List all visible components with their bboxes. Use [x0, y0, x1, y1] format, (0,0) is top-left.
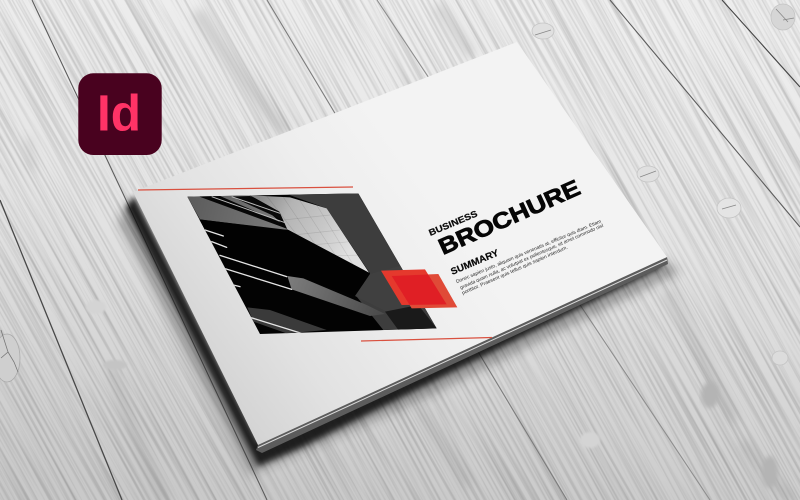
heading: summary: SUMMARY [449, 247, 501, 278]
lower facade [287, 276, 385, 316]
dark sky [287, 193, 437, 330]
upper black stripes [199, 196, 289, 229]
central black band [200, 220, 370, 276]
brochure [133, 42, 668, 453]
red rule top [138, 187, 353, 190]
body paragraph: porttitor. Praesent quis tellus quis sapien interdum. [461, 245, 569, 296]
red rule bottom [361, 338, 492, 341]
brochure page edge [256, 257, 668, 453]
brochure shadow [118, 196, 680, 474]
heading: business: BUSINESS [427, 209, 479, 238]
icon: Adobe InDesign [78, 73, 162, 155]
cover photo: black and white building [187, 193, 457, 334]
facade grid lines [267, 196, 360, 265]
heading: brochure: BROCHURE [435, 175, 584, 260]
red overlapping squares [381, 269, 457, 308]
lower dark gray block [355, 274, 370, 297]
icon letters: Id [97, 85, 141, 142]
lower right glass [385, 305, 437, 330]
window highlights [205, 230, 302, 333]
body paragraph: Donec sapien justo, aliquam quis venenatis at, efficitur quis diam. Etiam [455, 219, 602, 285]
light facade [250, 195, 369, 273]
body paragraph: gravida quam nulla, ac volutpat ex pellentesque, sit amet commodo nisl [459, 223, 604, 291]
upper facade strip [187, 195, 288, 230]
lower glazing [247, 307, 327, 333]
brochure cover [133, 42, 667, 445]
